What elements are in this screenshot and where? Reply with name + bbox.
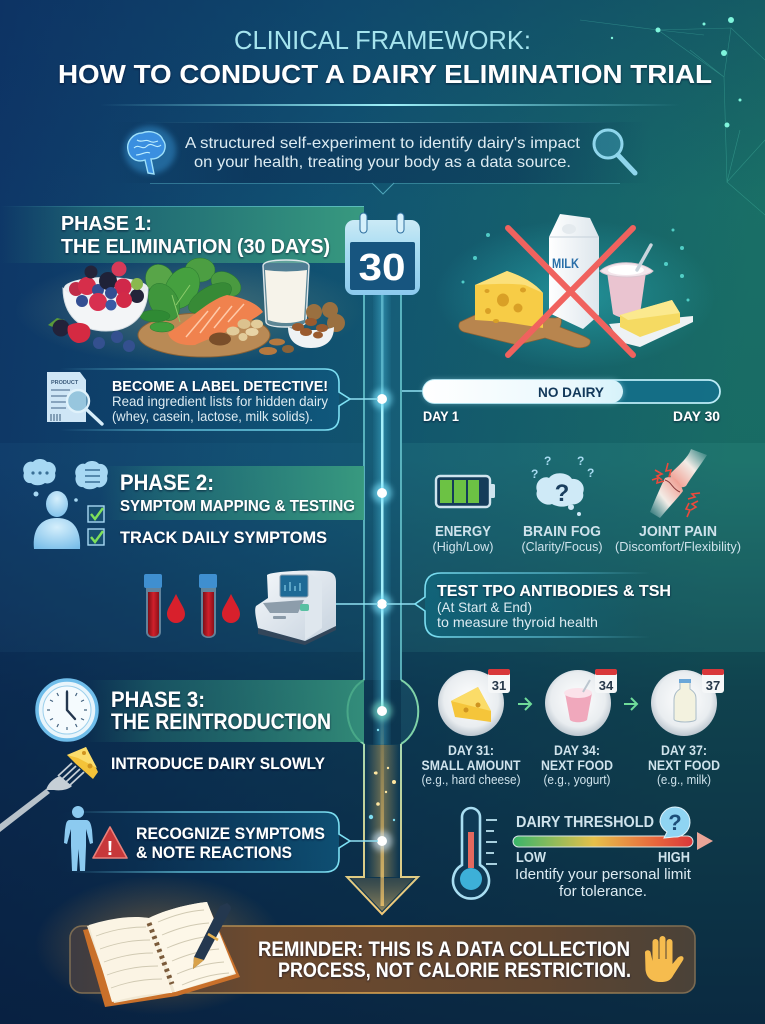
intro callout: on your health, treating your body as a data source. xyxy=(194,154,571,171)
arrow: day 34 to 37 xyxy=(624,698,637,710)
icon: calendar 30: 30 xyxy=(358,247,406,289)
icon: thermometer xyxy=(453,808,497,899)
dairy threshold scale: DAIRY THRESHOLD xyxy=(516,814,654,831)
title: HOW TO CONDUCT A DAIRY ELIMINATION TRIAL xyxy=(58,59,712,89)
title xyxy=(58,25,712,89)
illustration: allowed foods xyxy=(15,255,365,365)
panel: label detective: (whey, casein, lactose, milk solids). xyxy=(112,408,313,424)
icon: warning triangle: ! xyxy=(107,838,113,860)
icon: question bubble xyxy=(660,807,690,838)
symptom labels: (Clarity/Focus) xyxy=(522,539,602,554)
icon: clock xyxy=(37,680,97,740)
symptom labels: (Discomfort/Flexibility) xyxy=(615,539,741,554)
progress bar: no dairy: DAY 1 xyxy=(423,408,459,424)
day 31 plate xyxy=(438,669,510,736)
panel: TPO and TSH test xyxy=(336,573,671,637)
panel: phase 2 heading: TRACK DAILY SYMPTOMS xyxy=(120,529,327,547)
icon: brain fog cloud: ? xyxy=(555,480,569,507)
icon: brain fog cloud: ? xyxy=(531,467,538,481)
icon: brain fog cloud: ? xyxy=(577,454,584,468)
panel: phase 1 heading xyxy=(0,206,364,263)
icon: brain fog cloud: ? xyxy=(544,454,551,468)
icon: question bubble: ? xyxy=(668,810,682,835)
icon: battery energy xyxy=(436,476,495,507)
icon: product label under magnifier: PRODUCT xyxy=(51,380,79,386)
icon: brain fog cloud: ? xyxy=(587,466,594,480)
day 37 plate: 37 xyxy=(706,678,720,693)
butter xyxy=(609,316,693,347)
dairy threshold scale: Identify your personal limit xyxy=(515,866,692,883)
panel: reminder: PROCESS, NOT CALORIE RESTRICTION. xyxy=(278,959,631,982)
schedule labels: (e.g., milk) xyxy=(657,772,711,787)
panel: TPO and TSH test: TEST TPO ANTIBODIES & TSH xyxy=(437,583,671,600)
symptom labels: ENERGY xyxy=(435,524,491,540)
panel: reminder: REMINDER: THIS IS A DATA COLLECTION xyxy=(258,938,630,961)
schedule labels: DAY 31: xyxy=(448,742,494,758)
panel: phase 3 heading: PHASE 3: xyxy=(111,687,205,712)
icon: calendar 30 xyxy=(345,213,420,295)
day 37 plate xyxy=(651,669,724,736)
panel: recognize symptoms xyxy=(55,806,378,872)
bowl of berries xyxy=(63,288,148,331)
yogurt cup xyxy=(607,272,646,318)
panel: phase 1 heading: PHASE 1: xyxy=(61,213,152,235)
dairy threshold scale xyxy=(513,807,713,900)
glass of milk xyxy=(263,260,309,327)
milk carton xyxy=(549,214,599,329)
panel: TPO and TSH test: (At Start & End) xyxy=(437,599,532,615)
icon: fork with cheese xyxy=(0,747,98,832)
bowl of almonds xyxy=(306,302,345,332)
symptom labels: (High/Low) xyxy=(432,539,494,554)
intro callout xyxy=(110,122,650,194)
panel: label detective: BECOME A LABEL DETECTIVE! xyxy=(112,378,328,395)
day 34 plate xyxy=(545,669,617,736)
panel: shaded section behind phase 2 xyxy=(0,443,765,652)
schedule labels: DAY 34: xyxy=(554,742,600,758)
mixed nuts xyxy=(209,319,263,346)
loose berries xyxy=(48,318,135,352)
progress bar: no dairy xyxy=(402,380,720,424)
day 34 plate: 34 xyxy=(599,678,614,693)
schedule labels: (e.g., yogurt) xyxy=(544,772,610,787)
panel: phase 3 heading xyxy=(85,680,364,773)
icon: lab analyser machine xyxy=(255,571,336,645)
icon: raised hand xyxy=(645,936,684,982)
illustration: excluded dairy with red cross xyxy=(435,214,715,370)
progress bar: no dairy: NO DAIRY xyxy=(538,384,605,400)
icon: brain fog cloud xyxy=(531,454,594,516)
panel: phase 2 heading: SYMPTOM MAPPING & TESTING xyxy=(120,498,355,515)
dairy threshold scale: for tolerance. xyxy=(559,883,647,900)
panel: phase 2 heading: PHASE 2: xyxy=(120,470,214,495)
panel: TPO and TSH test: to measure thyroid health xyxy=(437,614,598,630)
phase 3 node ring xyxy=(348,680,418,744)
spinach leaves xyxy=(140,258,245,332)
panel: reminder xyxy=(35,875,695,1015)
schedule labels: DAY 37: xyxy=(661,742,707,758)
icon: open notebook with pen xyxy=(83,902,240,1007)
day 31 plate: 31 xyxy=(492,678,506,693)
icon: blood tubes and drops xyxy=(144,574,240,638)
panel: phase 1 heading: THE ELIMINATION (30 DAYS) xyxy=(61,236,330,258)
schedule labels: (e.g., hard cheese) xyxy=(422,772,520,787)
lower shaft and arrowhead xyxy=(347,744,418,914)
central timeline xyxy=(347,295,418,914)
panel: phase 2 heading xyxy=(100,466,364,547)
icon: person thinking with checklist xyxy=(23,459,108,549)
schedule labels xyxy=(422,742,720,787)
salmon xyxy=(168,295,263,345)
title: CLINICAL FRAMEWORK: xyxy=(234,25,531,55)
symptom labels: BRAIN FOG xyxy=(523,524,601,540)
icon: joint pain xyxy=(650,449,707,518)
wooden plate xyxy=(138,313,270,357)
panel: recognize symptoms: & NOTE REACTIONS xyxy=(136,843,292,862)
icon: brain xyxy=(124,126,176,174)
progress bar: no dairy: DAY 30 xyxy=(673,408,720,424)
arrow: day 31 to 34 xyxy=(518,698,531,710)
dairy threshold scale: LOW xyxy=(516,850,546,866)
schedule labels: NEXT FOOD xyxy=(541,757,613,773)
panel: label detective: Read ingredient lists for hidden dairy xyxy=(112,393,328,409)
icon: product label under magnifier xyxy=(47,372,102,424)
icon: magnifier xyxy=(594,130,635,173)
red cross xyxy=(508,228,633,355)
timeline nodes xyxy=(372,389,392,851)
illustration: excluded dairy with red cross: MILK xyxy=(552,255,579,271)
symptom labels xyxy=(432,524,741,554)
board xyxy=(459,315,590,348)
schedule labels: NEXT FOOD xyxy=(648,757,720,773)
panel: recognize symptoms: RECOGNIZE SYMPTOMS xyxy=(136,824,325,843)
cheese xyxy=(475,271,543,328)
icon: standing person xyxy=(64,806,93,871)
schedule labels: SMALL AMOUNT xyxy=(422,757,521,773)
network decoration top right xyxy=(580,17,765,215)
intro callout: A structured self-experiment to identify dairy's impact xyxy=(185,135,581,152)
panel: label detective xyxy=(47,369,378,430)
dairy threshold scale: HIGH xyxy=(658,850,690,866)
panel: phase 3 heading: THE REINTRODUCTION xyxy=(111,709,331,734)
panel: phase 3 heading: INTRODUCE DAIRY SLOWLY xyxy=(111,755,325,773)
symptom labels: JOINT PAIN xyxy=(639,524,717,540)
reintroduction schedule xyxy=(422,669,724,787)
icon: warning triangle xyxy=(93,827,127,860)
